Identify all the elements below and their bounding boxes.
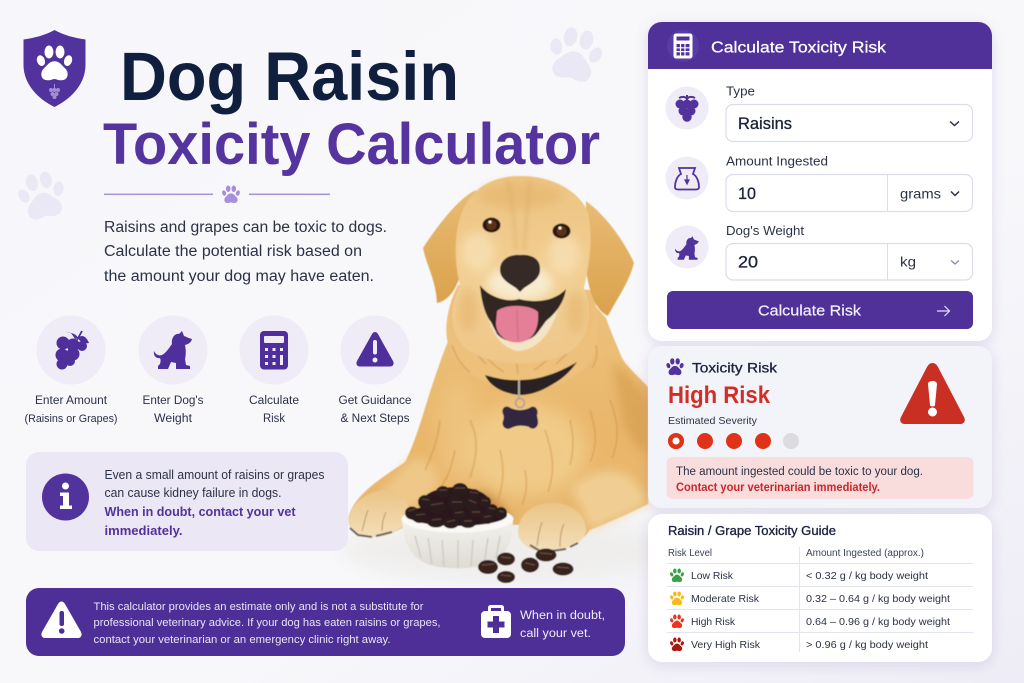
field: dog's weight: Dog's Weight [726,224,805,238]
intro paragraph: the amount your dog may have eaten. [104,268,374,285]
alert message: Contact your veterinarian immediately. [676,482,880,494]
disclaimer banner: contact your veterinarian or an emergency clinic right away. [94,634,390,646]
lower jaw [486,306,558,351]
step: get guidance: & Next Steps [340,413,410,425]
step: enter dog's weight: Weight [154,413,193,425]
raisins heap [405,483,507,528]
fur strokes [425,400,617,505]
row: moderate risk: Moderate Risk [691,593,760,605]
info callout: immediately. [104,524,182,538]
calculator header [648,22,992,69]
eyes [482,218,570,238]
warning icon [41,602,82,638]
row: moderate risk: 0.32 – 0.64 g / kg body weight [806,593,950,605]
field: amount ingested [666,154,972,212]
dog photo illustration [340,176,680,584]
intro paragraph: Calculate the potential risk based on [104,243,362,260]
disclaimer banner: professional veterinary advice. If your dog has eaten raisins or grapes, [94,617,440,629]
row: moderate risk [670,591,950,605]
intro paragraph: Raisins and grapes can be toxic to dogs. [104,219,387,236]
medical kit icon [481,605,511,638]
row: very high risk: > 0.96 g / kg body weight [806,639,928,651]
calculator header: Calculate Toxicity Risk [711,40,886,56]
right paw [518,503,586,551]
left paw [349,490,408,537]
field: type: Type [726,84,755,98]
body shading [370,362,648,530]
field: amount ingested: Amount Ingested [726,154,828,168]
step: enter dog's weight: Enter Dog's [142,395,204,407]
panel: calculator [648,22,992,341]
field: type [666,84,972,142]
panel: toxicity risk result [648,346,992,508]
neck ruff [446,285,598,391]
open mouth [480,285,566,342]
intro paragraph [104,219,387,285]
step: calculate risk: Calculate [249,395,299,407]
tongue [496,306,538,343]
field: dog's weight: kg [900,254,916,270]
step: get guidance: Get Guidance [338,395,412,407]
guide table: Amount Ingested (approx.) [806,548,924,559]
row: high risk: 0.64 – 0.96 g / kg body weight [806,616,950,628]
info callout: Even a small amount of raisins or grapes [104,468,324,482]
step: enter amount: Enter Amount [35,395,108,407]
title divider with paw [104,185,330,203]
severity label: Estimated Severity [668,415,758,427]
calculate button: Calculate Risk [758,302,862,320]
guide heading: Raisin / Grape Toxicity Guide [668,523,836,538]
ruff strokes [452,320,597,374]
severity dots [670,433,799,449]
decorative paw left [13,168,71,223]
disclaimer banner: This calculator provides an estimate only and is not a substitute for [94,601,424,613]
nose [500,255,540,292]
left paw toes [362,510,386,531]
panel: toxicity guide [648,514,992,662]
warning triangle [900,363,965,424]
step: get guidance [338,316,412,425]
raisin highlights [408,488,504,522]
dog body [348,300,648,551]
disclaimer banner: When in doubt, [520,610,605,622]
step: calculate risk: Risk [263,413,285,425]
info callout: When in doubt, contact your vet [104,505,296,519]
disclaimer banner [26,588,625,656]
step: calculate risk [240,316,308,425]
alert message [666,457,974,499]
right paw toes [537,522,564,547]
disclaimer banner: call your vet. [520,628,591,640]
guide table: Risk Level [668,548,712,559]
row: high risk: High Risk [691,616,736,628]
info icon [42,474,89,520]
title [103,38,600,177]
row: high risk [670,614,950,628]
raisin bowl [402,483,514,568]
info callout [26,452,348,551]
row: very high risk: Very High Risk [691,639,761,651]
field: amount ingested: 10 [738,185,756,203]
step: enter amount [24,316,118,425]
risk level: High Risk [668,382,771,409]
field: amount ingested: grams [900,186,941,202]
step: enter dog's weight [138,316,208,425]
left ear [423,190,476,303]
tongue crease [517,310,518,340]
title line 1: Dog Raisin [120,38,459,115]
collar [485,362,577,395]
field: type: Raisins [738,115,792,133]
floor [340,516,680,584]
left paw nails [350,528,392,537]
logo shield [24,30,86,107]
result heading: Toxicity Risk [692,360,778,376]
right ear [586,201,634,316]
info callout: can cause kidney failure in dogs. [104,486,282,500]
title line 2: Toxicity Calculator [103,112,600,177]
head [452,176,591,364]
decorative paw top [542,23,608,85]
tag [502,380,538,429]
right paw nails [530,543,578,551]
loose raisins [478,548,574,583]
field: dog's weight [666,224,972,280]
row: low risk: < 0.32 g / kg body weight [806,570,928,582]
paw icon [666,358,684,375]
row: low risk: Low Risk [691,570,734,582]
alert message: The amount ingested could be toxic to your dog. [676,466,923,478]
field: dog's weight: 20 [738,254,758,272]
calculate button [667,291,973,329]
row: very high risk [670,637,928,651]
head shading [458,180,586,334]
guide table [667,547,973,652]
row: low risk [670,568,928,582]
step: enter amount: (Raisins or Grapes) [24,413,118,425]
